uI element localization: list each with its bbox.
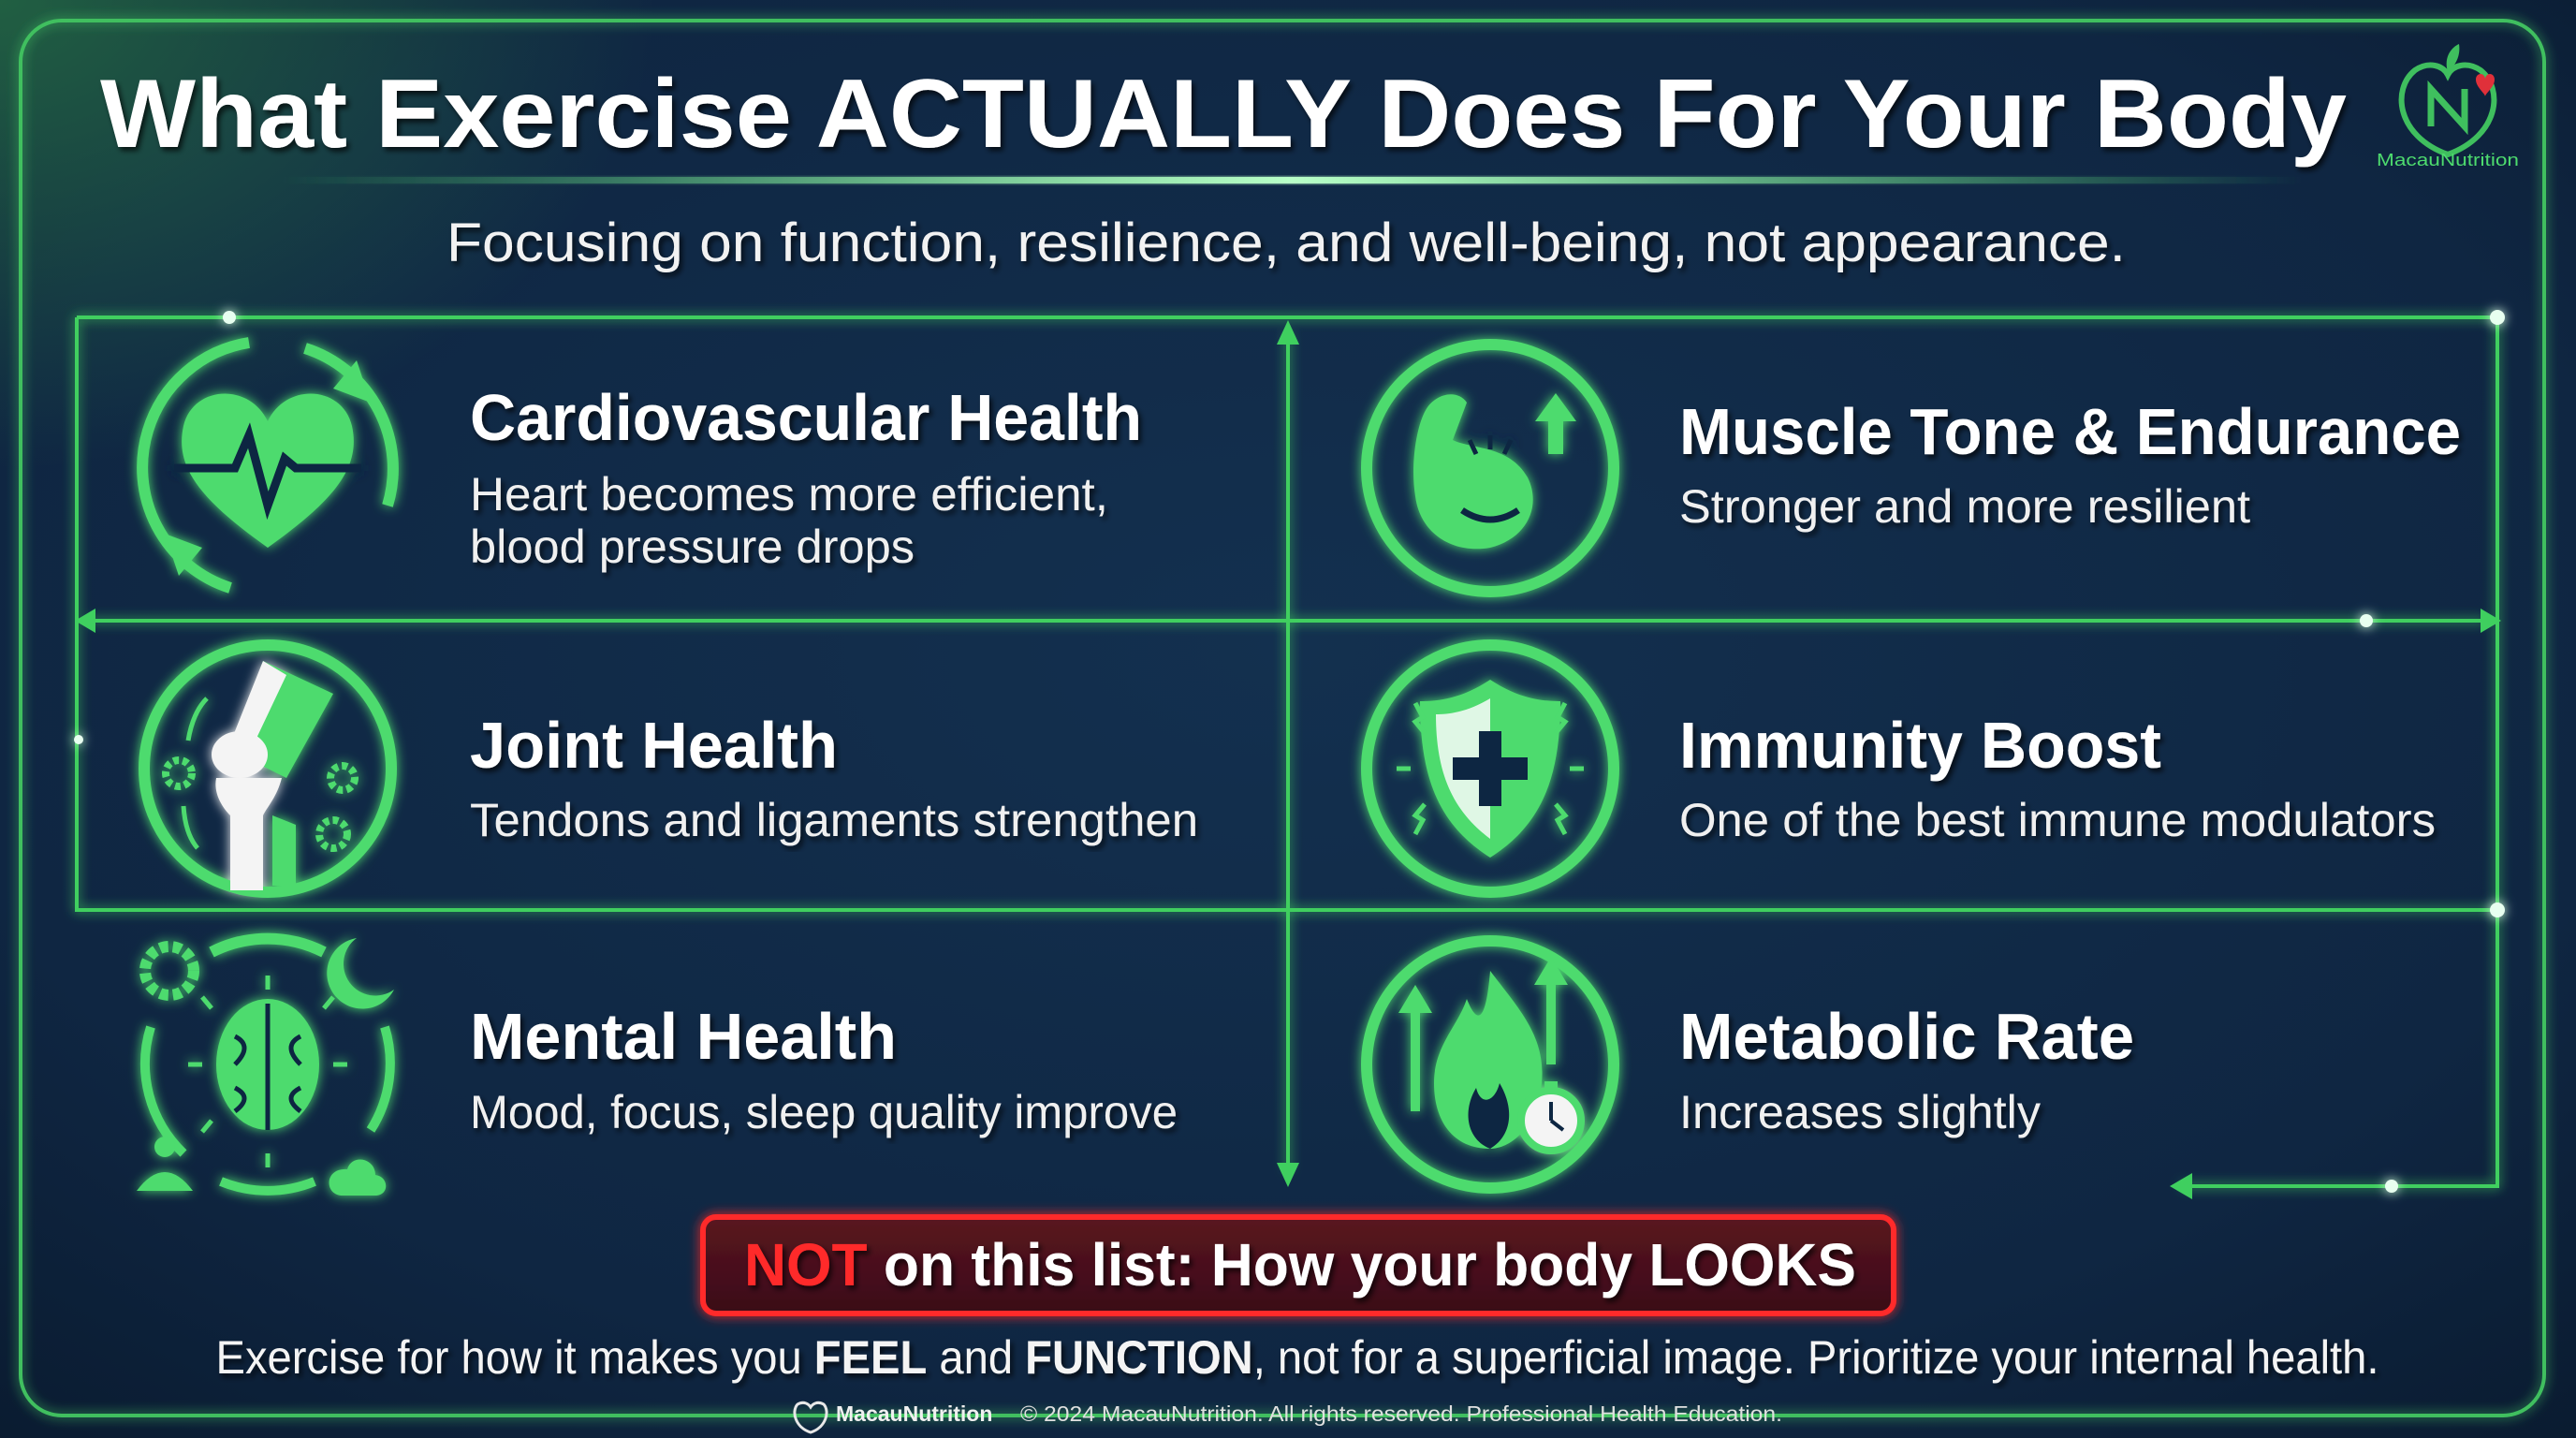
description: Tendons and ligaments strengthen [470, 794, 1198, 846]
sparkles [74, 310, 2505, 1193]
subtitle: Focusing on function, resilience, and well-being, not appearance. [446, 213, 2126, 273]
description: Stronger and more resilient [1679, 480, 2250, 533]
callout: not on this list [703, 1217, 1894, 1313]
icon: flexed arm [1367, 345, 1614, 592]
footer [795, 1401, 1782, 1432]
icon: brain with gear, moon, meditation [137, 938, 394, 1196]
description: One of the best immune modulators [1679, 794, 2436, 846]
heading: Metabolic Rate [1679, 1000, 2134, 1073]
arrowheads [75, 320, 2501, 1199]
panel: immunity [1367, 645, 2436, 892]
footer: MacauNutrition [836, 1401, 992, 1426]
icon: shield with cross [1367, 645, 1614, 892]
logo [2377, 44, 2519, 169]
description: Increases slightly [1679, 1086, 2041, 1138]
description: blood pressure drops [470, 521, 915, 573]
logo: MacauNutrition [2377, 151, 2519, 169]
title underline glow [281, 177, 2303, 183]
panel: muscle [1367, 345, 2461, 592]
panel: joint [144, 645, 1198, 892]
heading: Cardiovascular Health [470, 381, 1142, 454]
footer: © 2024 MacauNutrition. All rights reserved. Professional Health Education. [1020, 1401, 1782, 1426]
heading: Mental Health [470, 1000, 897, 1073]
icon: flame with stopwatch [1367, 941, 1614, 1188]
bottom message: Exercise for how it makes you FEEL and FUNCTION, not for a superficial image. Prioritize your internal health. [215, 1331, 2379, 1384]
title: What Exercise ACTUALLY Does For Your Body [100, 60, 2347, 169]
icon: knee joint [144, 645, 391, 892]
description: Heart becomes more efficient, [470, 468, 1108, 521]
heading: Immunity Boost [1679, 709, 2161, 782]
panel: mental [137, 938, 1178, 1196]
heading: Muscle Tone & Endurance [1679, 395, 2461, 468]
callout: not on this list: NOT on this list: How your body LOOKS [744, 1231, 1856, 1299]
panel: metabolic [1367, 941, 2134, 1188]
panel: cardiovascular [142, 343, 1142, 588]
heading: Joint Health [470, 709, 838, 782]
grid lines [77, 317, 2497, 1186]
icon: heart with cycle arrows [142, 343, 393, 588]
description: Mood, focus, sleep quality improve [470, 1086, 1178, 1138]
